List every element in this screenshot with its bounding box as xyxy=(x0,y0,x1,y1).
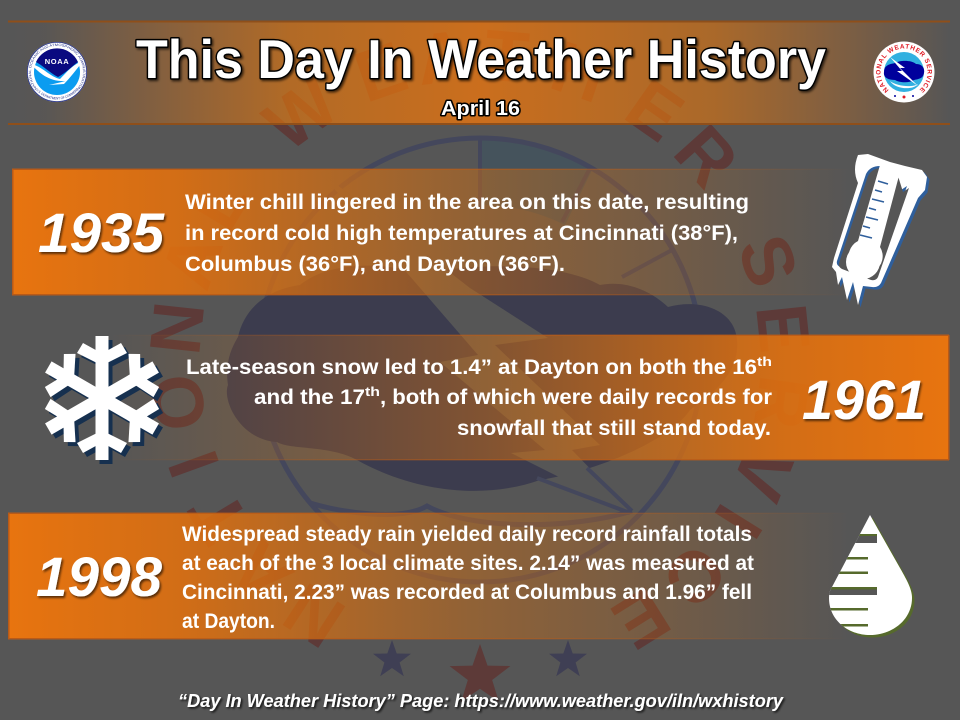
watermark: National Weather Service logo: O xyxy=(135,369,222,436)
watermark: National Weather Service logo: N xyxy=(135,298,220,358)
text block: snowfall that still stand today. xyxy=(457,417,771,440)
text block: at each of the 3 local climate sites. 2.14” was measured at xyxy=(182,552,754,575)
watermark: National Weather Service logo: H xyxy=(541,26,617,119)
watermark: National Weather Service logo: E xyxy=(612,64,697,158)
title: This Day In Weather History xyxy=(136,28,826,90)
watermark: National Weather Service logo: L xyxy=(174,164,265,243)
text block: Winter chill lingered in the area on this date, resulting xyxy=(185,191,749,214)
text block: th xyxy=(365,384,380,399)
icon: NWS logo: NATIONAL WEATHER SERVICE xyxy=(876,44,932,93)
year: 1998 xyxy=(36,545,163,608)
watermark: National Weather Service logo: W xyxy=(250,62,352,166)
watermark: National Weather Service logo: T xyxy=(174,477,265,556)
text block xyxy=(186,354,772,440)
text block: Late-season snow led to 1.4” at Dayton on both the 16 xyxy=(186,356,757,379)
text block: Widespread steady rain yielded daily record rainfall totals xyxy=(182,523,752,546)
watermark: National Weather Service logo: V xyxy=(716,437,808,511)
text block: at Dayton. xyxy=(182,610,275,633)
date: April 16 xyxy=(441,98,520,120)
text block: Columbus (36°F), and Dayton (36°F). xyxy=(185,253,565,276)
watermark: National Weather Service logo: A xyxy=(214,525,308,618)
text block: , both of which were daily records for xyxy=(380,386,772,409)
panel: 1998 xyxy=(8,512,850,640)
panel: 1935 xyxy=(12,168,850,296)
watermark: National Weather Service logo: T xyxy=(481,15,532,99)
icon: NOAA logo: NOAA xyxy=(45,57,69,66)
text block: th xyxy=(757,354,772,369)
year: 1935 xyxy=(38,201,165,264)
watermark: National Weather Service logo: R xyxy=(738,371,824,434)
watermark: National Weather Service logo: C xyxy=(648,528,742,622)
watermark: National Weather Service logo: A xyxy=(412,15,474,101)
watermark: National Weather Service logo: E xyxy=(600,571,683,664)
year: 1961 xyxy=(802,368,926,431)
panel: 1961 xyxy=(110,334,950,460)
watermark: National Weather Service logo: N xyxy=(271,567,358,663)
text block xyxy=(185,191,749,276)
text block: in record cold high temperatures at Cincinnati (38°F), xyxy=(185,222,738,245)
icon: snowflake xyxy=(36,336,172,464)
watermark: National Weather Service logo: A xyxy=(146,223,239,299)
text block: Cincinnati, 2.23” was recorded at Columbus and 1.96” fell xyxy=(182,581,752,604)
watermark: National Weather Service logo: E xyxy=(740,300,825,356)
icon: NOAA logo: NATIONAL OCEANIC AND ATMOSPHERIC ADMINISTRATION xyxy=(28,44,86,90)
footer: page link: “Day In Weather History” Page: https://www.weather.gov/iln/wxhistory xyxy=(178,691,784,711)
text block xyxy=(182,523,754,633)
watermark: National Weather Service logo xyxy=(135,15,825,702)
icon: rain drop xyxy=(820,515,914,638)
watermark: National Weather Service logo: R xyxy=(659,110,753,203)
watermark: National Weather Service logo: I xyxy=(699,491,777,551)
watermark: National Weather Service logo: E xyxy=(345,27,417,118)
icon: frozen thermometer xyxy=(832,154,930,308)
header band xyxy=(8,20,950,125)
watermark: National Weather Service logo: I xyxy=(153,441,235,487)
watermark: National Weather Service logo: S xyxy=(722,225,813,297)
text block: and the 17 xyxy=(254,386,365,409)
